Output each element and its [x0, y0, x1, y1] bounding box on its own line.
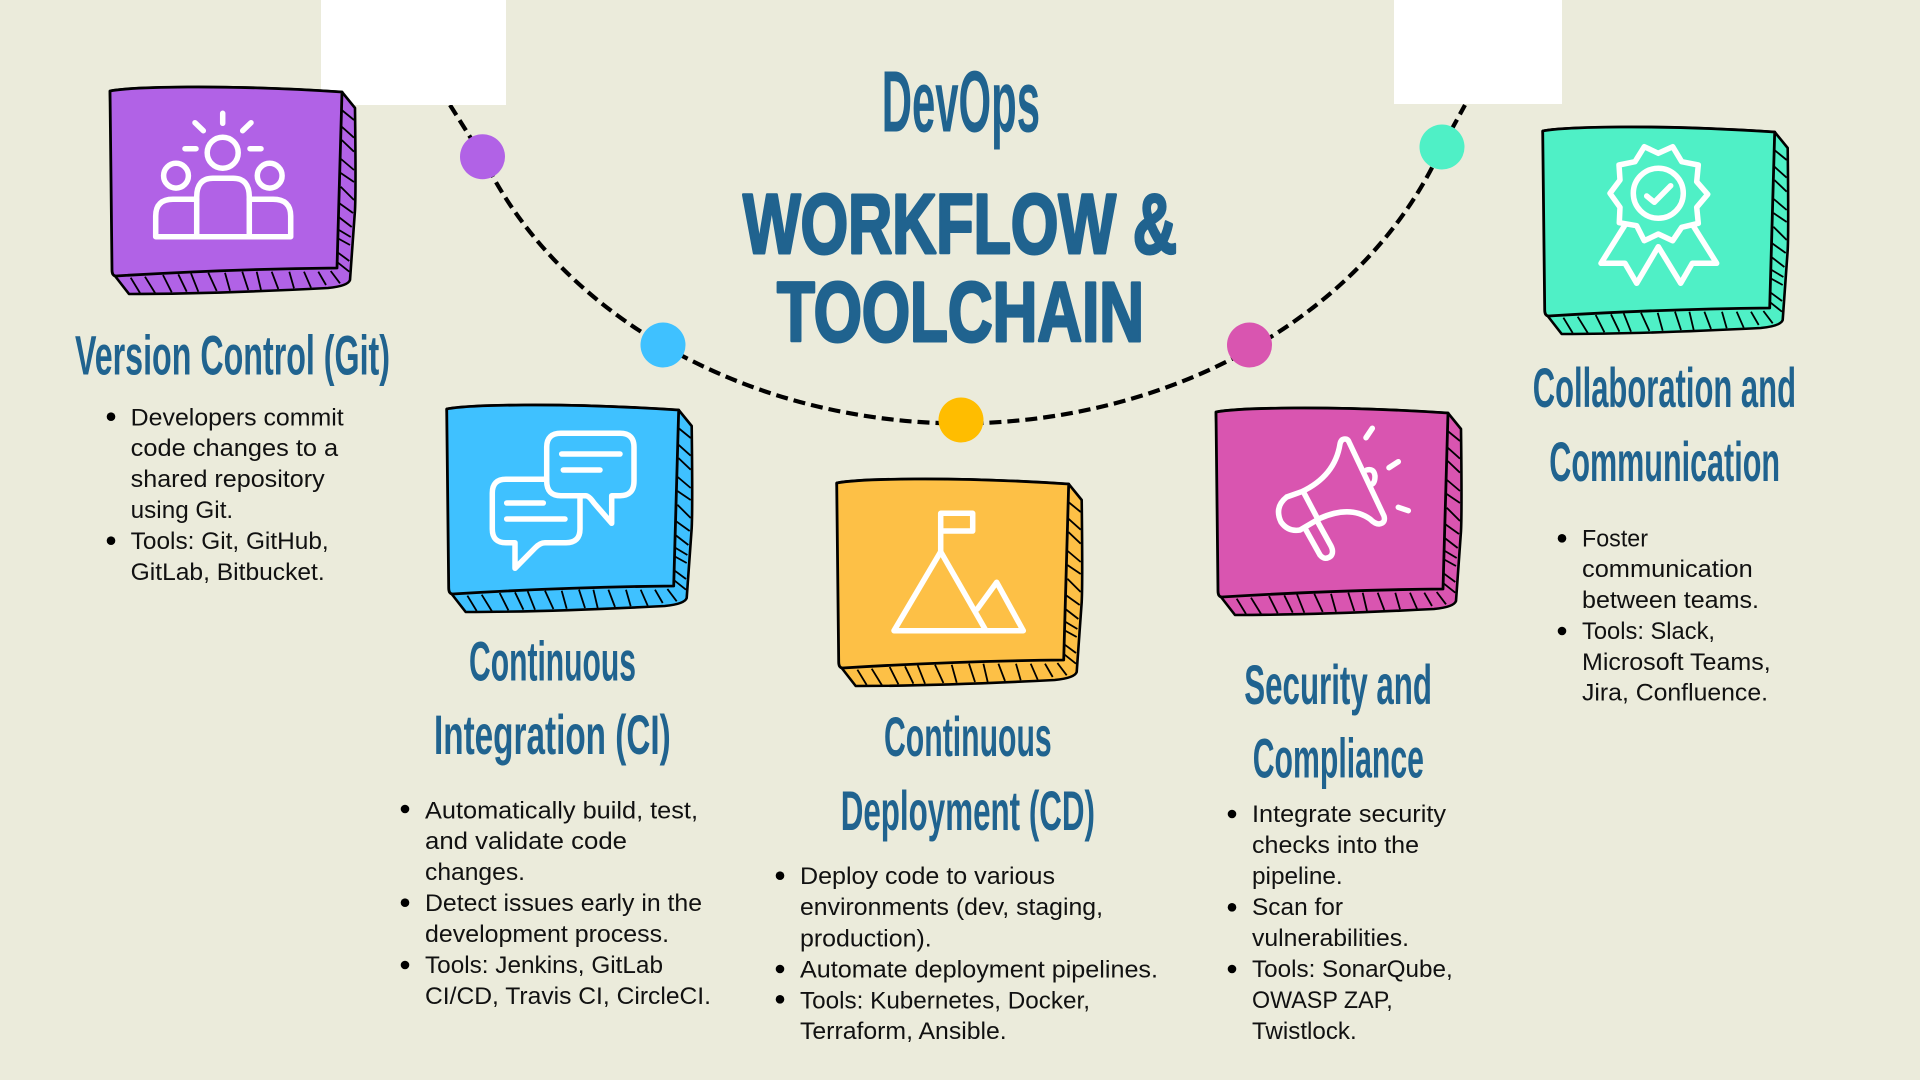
heading [1533, 356, 1796, 493]
bullet list: CI/CD, Travis CI, CircleCI. [425, 983, 711, 1010]
bullet list: Terraform, Ansible. [800, 1018, 1007, 1045]
bullet list: Twistlock. [1252, 1018, 1357, 1045]
panel: security and compliance [1216, 408, 1462, 1045]
icon: chat bubbles [492, 433, 634, 568]
yellow box [837, 479, 1082, 686]
heading [1244, 653, 1432, 790]
bullet list: Detect issues early in the [425, 890, 702, 917]
bullet list: Foster [1582, 526, 1648, 552]
bullet list [1558, 526, 1771, 706]
bullet list: Tools: Jenkins, GitLab [425, 952, 663, 979]
heading: Version Control (Git) [75, 324, 390, 386]
bullet list: production). [800, 925, 932, 952]
bullet list: Tools: SonarQube, [1252, 956, 1453, 983]
bullet list: OWASP ZAP, [1252, 987, 1393, 1014]
title: TOOLCHAIN [777, 265, 1144, 359]
bullet list [776, 863, 1158, 1045]
bullet list: Scan for [1252, 894, 1343, 921]
bullet list: changes. [425, 859, 525, 886]
icon: mountain flag [894, 513, 1023, 631]
white corner rectangle left [321, 0, 506, 105]
title: DevOps [882, 54, 1040, 151]
timeline dots [460, 124, 1464, 442]
heading: Integration (CI) [434, 703, 671, 766]
panel: collaboration and communication [1533, 127, 1796, 707]
bullet list: Integrate security [1252, 801, 1446, 828]
heading: Deployment (CD) [841, 779, 1095, 842]
bullet list [401, 798, 711, 1010]
icon: team [156, 113, 291, 237]
bullet list: Automate deployment pipelines. [800, 956, 1158, 983]
bullet list: pipeline. [1252, 863, 1343, 890]
purple box [110, 87, 356, 294]
bullet list: Developers commit [131, 404, 344, 432]
bullet list: Deploy code to various [800, 863, 1055, 890]
heading: Continuous [469, 630, 636, 692]
heading: Compliance [1253, 726, 1424, 790]
panel: continuous integration [401, 405, 711, 1010]
bullet list: using Git. [131, 497, 233, 524]
bullet list: and validate code [425, 828, 627, 855]
heading: Continuous [884, 705, 1052, 768]
bullet list [107, 404, 344, 586]
icon: award ribbon [1601, 147, 1717, 283]
bullet list: Tools: Git, GitHub, [131, 528, 329, 555]
panel: version control [75, 87, 390, 586]
bullet list: between teams. [1582, 587, 1759, 614]
bullet list: Tools: Slack, [1582, 618, 1715, 645]
bullet list: Tools: Kubernetes, Docker, [800, 987, 1090, 1014]
bullet list: vulnerabilities. [1252, 925, 1409, 952]
bullet list: communication [1582, 556, 1753, 583]
white corner rectangle right [1394, 0, 1562, 104]
bullet list: Jira, Confluence. [1582, 680, 1768, 706]
bullet list: shared repository [131, 466, 325, 493]
dashed timeline arc [450, 105, 1465, 424]
bullet list [1228, 801, 1453, 1045]
bullet list: Automatically build, test, [425, 798, 698, 824]
bullet list: GitLab, Bitbucket. [131, 559, 325, 586]
blue box [447, 405, 692, 612]
pink box [1216, 408, 1462, 615]
heading: Security and [1244, 653, 1432, 716]
icon: megaphone [1279, 428, 1408, 558]
title: WORKFLOW & [743, 177, 1177, 271]
bullet list: development process. [425, 921, 669, 948]
bullet list: Microsoft Teams, [1582, 649, 1771, 676]
title [743, 54, 1177, 359]
heading [434, 630, 671, 766]
bullet list: environments (dev, staging, [800, 894, 1103, 921]
bullet list: code changes to a [131, 435, 339, 462]
bullet list: checks into the [1252, 832, 1419, 859]
green box [1543, 127, 1788, 334]
panel: continuous deployment [776, 479, 1158, 1045]
heading [841, 705, 1095, 842]
